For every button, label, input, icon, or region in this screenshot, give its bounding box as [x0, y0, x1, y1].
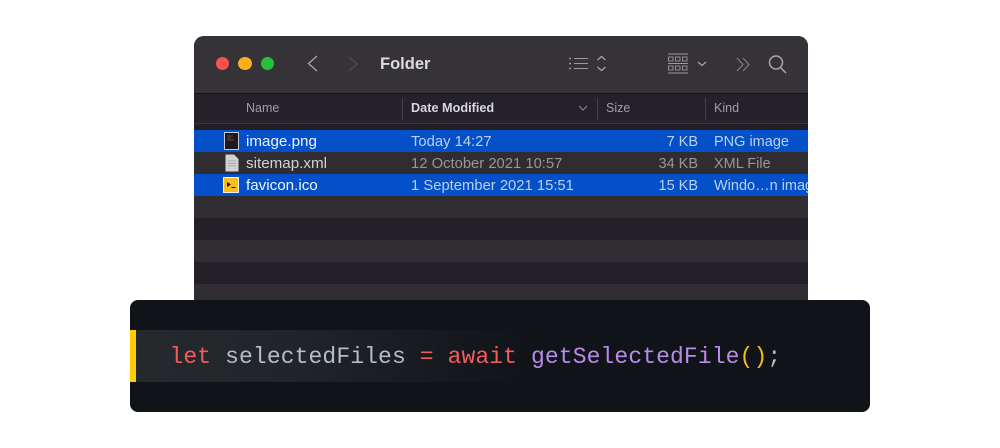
icon: list view	[569, 58, 588, 68]
icon: gallery view	[668, 54, 688, 73]
icon: toolbar icons	[308, 54, 786, 74]
text: favicon.ico: favicon.ico	[246, 177, 318, 194]
icon: forward chevron	[349, 57, 357, 71]
empty row 4	[194, 262, 808, 284]
text: sitemap kind: XML File	[714, 156, 771, 172]
column header: Date Modified: Date Modified	[411, 101, 494, 115]
empty row 3	[194, 240, 808, 262]
title: Folder: Folder	[380, 55, 430, 73]
window control: red	[216, 57, 229, 70]
row: sitemap.xml	[194, 152, 808, 174]
icon: xml file	[226, 154, 238, 172]
row: image.png selected	[194, 130, 808, 152]
column header: Name: Name	[246, 101, 279, 115]
icon: more chevrons	[737, 58, 749, 71]
icon: dropdown chevron	[698, 62, 706, 66]
text: favicon size: 15 KB	[658, 178, 698, 194]
text: favicon date: 1 September 2021 15:51	[411, 178, 574, 194]
gap above rows	[194, 124, 808, 130]
yellow marker	[130, 330, 136, 382]
text: image size: 7 KB	[667, 134, 698, 150]
text: sitemap.xml: sitemap.xml	[246, 155, 327, 172]
icon: image file	[224, 132, 239, 150]
code line: let selectedFiles = await getSelectedFile();	[170, 344, 781, 370]
empty row 2	[194, 218, 808, 240]
empty row 5	[194, 284, 808, 306]
panel: finder window	[194, 36, 808, 316]
text: image kind: PNG image	[714, 134, 789, 150]
icon: favicon file	[223, 177, 239, 193]
icon: back chevron	[308, 56, 317, 71]
text: sitemap size: 34 KB	[658, 156, 698, 172]
empty row 1	[194, 196, 808, 218]
column header: Kind: Kind	[714, 101, 739, 115]
window control: yellow	[238, 57, 252, 70]
panel: code block	[130, 300, 870, 412]
row: favicon.ico selected	[194, 174, 808, 196]
column header: Size: Size	[606, 101, 630, 115]
highlighted line	[130, 330, 530, 382]
text: image.png: image.png	[246, 133, 317, 150]
text: sitemap date: 12 October 2021 10:57	[411, 156, 562, 172]
column header background	[194, 94, 808, 124]
icon: sort arrows	[598, 56, 606, 70]
toolbar background	[194, 36, 808, 94]
text: image date: Today 14:27	[411, 134, 492, 150]
window control: green	[261, 57, 274, 70]
icon: search	[770, 56, 786, 73]
icon: sort chevron	[578, 106, 588, 111]
